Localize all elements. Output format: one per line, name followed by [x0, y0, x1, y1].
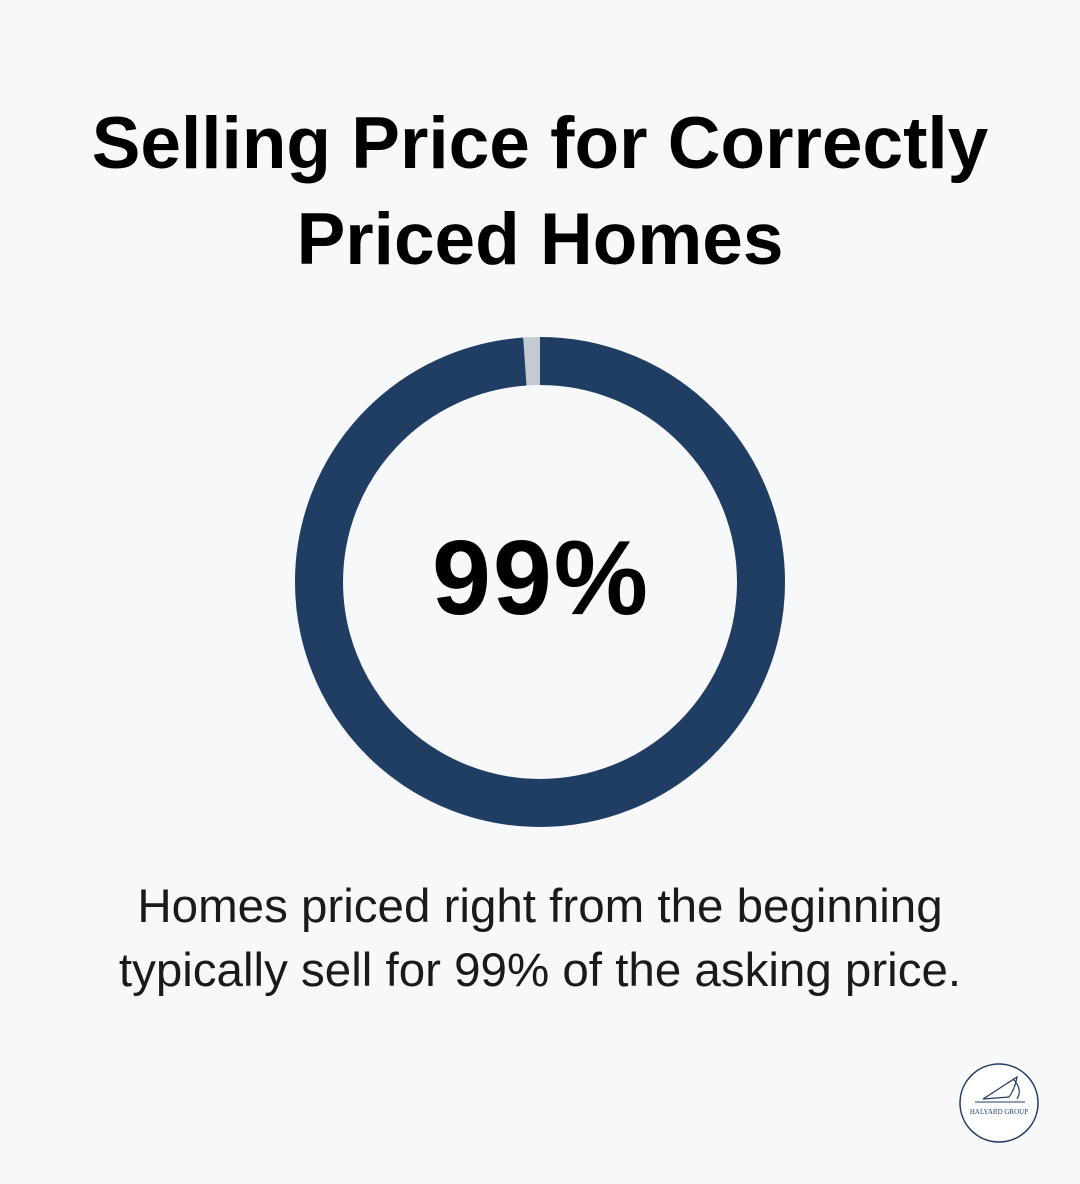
title: Selling Price for Correctly: [92, 103, 988, 184]
caption: typically sell for 99% of the asking price.: [119, 944, 961, 997]
donut chart: 99%: [432, 519, 648, 637]
caption: Homes priced right from the beginning: [137, 880, 943, 933]
logo: Halyard Group: [959, 1063, 1039, 1143]
title: [92, 103, 988, 280]
title: Priced Homes: [297, 199, 783, 280]
logo: Halyard Group: HALYARD GROUP: [970, 1108, 1028, 1116]
caption: [119, 880, 961, 997]
